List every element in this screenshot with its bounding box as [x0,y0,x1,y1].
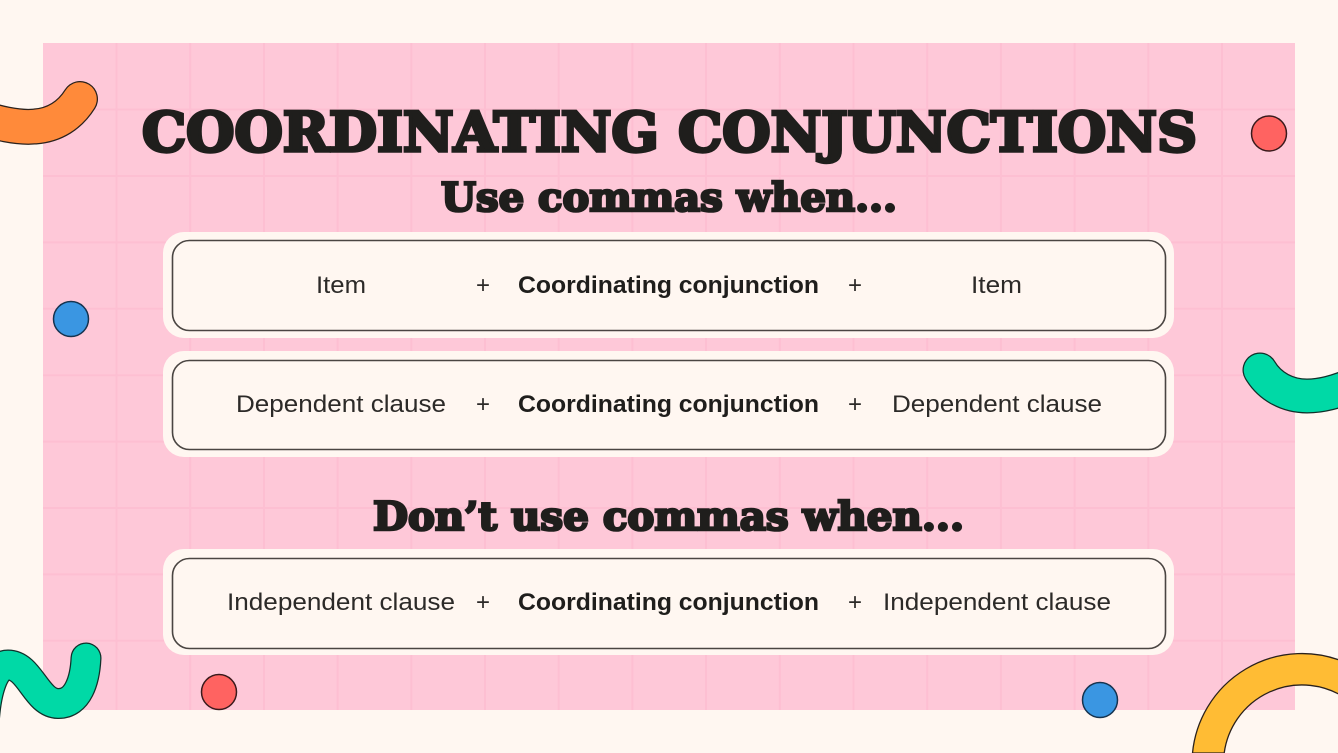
row: independent clause + conjunction + independent clause: Independent clause [883,589,1111,616]
row: independent clause + conjunction + independent clause [163,549,1174,655]
row: item + conjunction + item: Coordinating conjunction [518,272,819,299]
icon: blue dot left [54,302,88,336]
title: COORDINATING CONJUNCTIONS [142,100,1197,164]
icon: green wave [0,658,86,725]
row: item + conjunction + item: Item [316,272,366,299]
row: dependent clause + conjunction + dependent clause: + [848,391,862,418]
icon: green arc right [1260,370,1338,396]
row: item + conjunction + item: Item [971,272,1022,299]
row: dependent clause + conjunction + dependent clause: Dependent clause [236,391,446,418]
row: dependent clause + conjunction + dependent clause: Dependent clause [892,391,1102,418]
icon: red dot top right [1252,116,1286,151]
row: item + conjunction + item: + [848,272,862,299]
row: item + conjunction + item [163,232,1174,338]
heading: don't use commas: Don’t use commas when... [373,494,964,540]
row: independent clause + conjunction + independent clause: + [848,589,862,616]
icon: blue dot bottom right [1082,682,1118,718]
row: independent clause + conjunction + independent clause: Independent clause [227,589,455,616]
icon: orange squiggle [0,99,80,127]
row: item + conjunction + item: + [476,272,490,299]
row: independent clause + conjunction + independent clause: + [476,589,490,616]
heading: use commas: Use commas when... [441,175,897,221]
icon: red dot bottom left [202,674,236,710]
row: independent clause + conjunction + independent clause: Coordinating conjunction [518,589,819,616]
row: dependent clause + conjunction + dependent clause: Coordinating conjunction [518,391,819,418]
row: dependent clause + conjunction + dependent clause: + [476,391,490,418]
icon: yellow ring [1192,654,1338,753]
row: dependent clause + conjunction + dependent clause [163,351,1174,457]
